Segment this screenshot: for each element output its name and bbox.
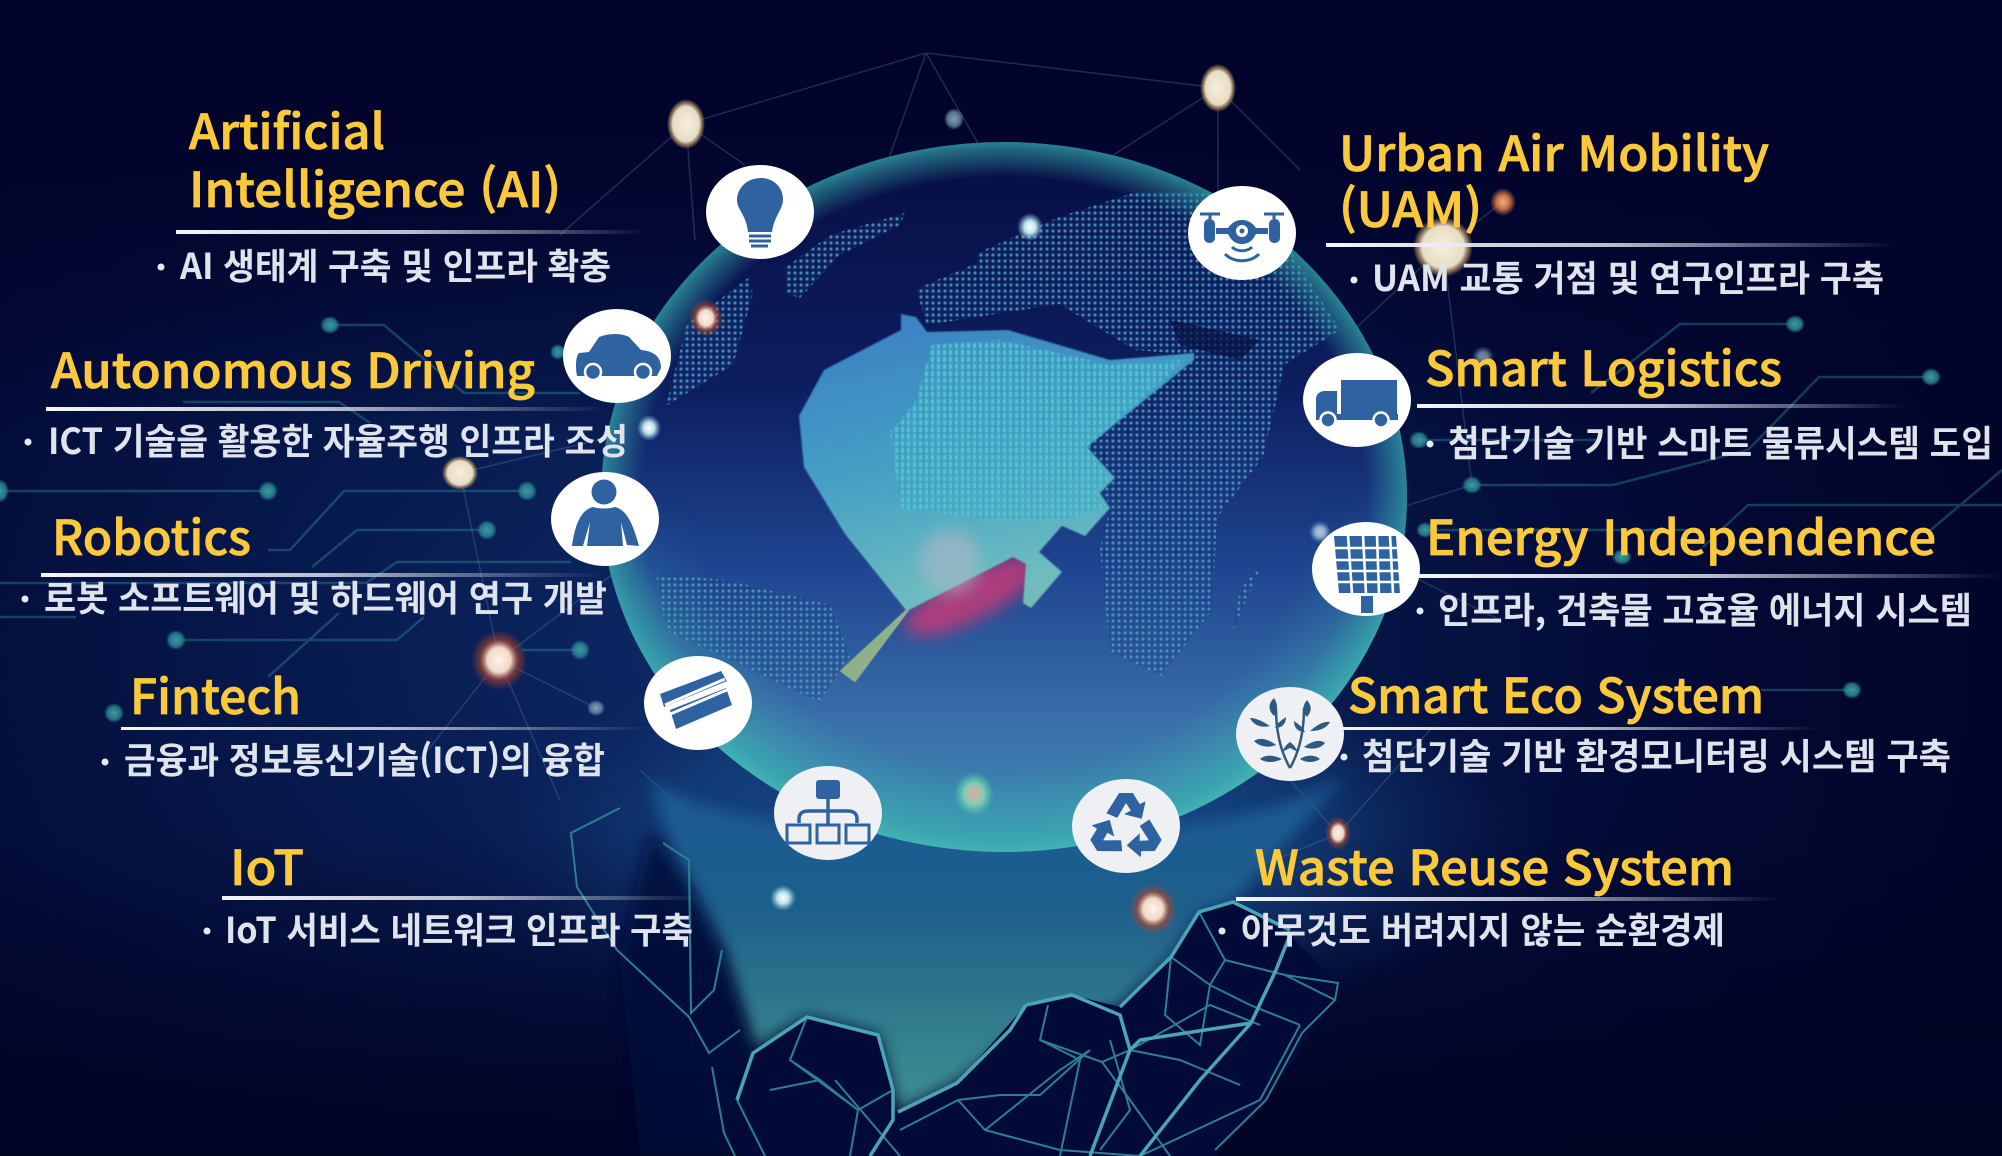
left hand shadow	[620, 830, 753, 1156]
panel: smart eco system	[1340, 657, 1951, 780]
description: 첨단기술 기반 스마트 물류시스템 도입	[1448, 415, 1993, 467]
title: Robotics	[52, 499, 251, 569]
panel: energy independence	[1416, 499, 2002, 634]
description: 금융과 정보통신기술(ICT)의 융합	[124, 732, 605, 784]
description: AI 생태계 구축 및 인프라 확충	[179, 238, 611, 290]
title: Urban Air Mobility	[1339, 115, 1769, 185]
blue glow behind globe	[440, 620, 1560, 1040]
description: 인프라, 건축물 고효율 에너지 시스템	[1438, 582, 1972, 634]
title: Fintech	[130, 658, 301, 728]
central plug shape	[799, 314, 1194, 682]
globe bottom rim highlight	[608, 544, 1385, 852]
panel: waste reuse system	[1218, 829, 1781, 954]
icon: org chart	[774, 766, 882, 860]
left finger	[737, 1017, 893, 1156]
dotted continents	[656, 192, 1340, 702]
dotted bright plug core	[890, 340, 1185, 520]
funnel of light	[650, 770, 1350, 1112]
title: (UAM)	[1339, 171, 1482, 241]
globe	[601, 142, 1407, 852]
title: Artificial	[189, 93, 385, 163]
title: Smart Logistics	[1425, 330, 1782, 400]
panel: robotics	[22, 499, 607, 622]
description: 로봇 소프트웨어 및 하드웨어 연구 개발	[44, 570, 607, 622]
title: Smart Eco System	[1348, 657, 1764, 727]
hands	[571, 808, 1338, 1156]
panel: urban air mobility	[1326, 115, 1896, 302]
title: Autonomous Driving	[51, 332, 535, 402]
icon: credit cards	[644, 656, 752, 750]
globe rim	[601, 142, 1407, 852]
description: 첨단기술 기반 환경모니터링 시스템 구축	[1362, 728, 1951, 780]
icon: truck	[1303, 353, 1411, 447]
panel: artificial intelligence	[158, 93, 646, 290]
glowing nodes	[0, 64, 1941, 935]
icon: light bulb	[706, 165, 814, 259]
description: 아무것도 버려지지 않는 순환경제	[1241, 902, 1725, 954]
circuit traces	[0, 324, 2002, 690]
panel: autonomous driving	[24, 332, 628, 465]
right hand	[893, 902, 1338, 1156]
description: UAM 교통 거점 및 연구인프라 구축	[1372, 250, 1884, 302]
panel: fintech	[102, 658, 651, 784]
icon: drone	[1188, 186, 1296, 280]
panel: iot	[204, 829, 702, 954]
network lines	[420, 53, 1503, 1020]
icon: person	[551, 472, 659, 566]
icon: car	[563, 309, 671, 403]
title: Energy Independence	[1426, 499, 1936, 569]
light spot	[920, 530, 980, 594]
panel: smart logistics	[1417, 330, 1993, 467]
description: ICT 기술을 활용한 자율주행 인프라 조성	[48, 413, 628, 465]
icon: recycle	[1072, 779, 1180, 873]
description: IoT 서비스 네트워크 인프라 구축	[225, 902, 693, 954]
title: Intelligence (AI)	[189, 151, 561, 221]
icon: eco plant	[1236, 687, 1344, 781]
title: Waste Reuse System	[1255, 829, 1734, 899]
pink glow	[895, 541, 1049, 651]
icon: solar panel	[1312, 522, 1420, 616]
title: IoT	[230, 829, 304, 899]
